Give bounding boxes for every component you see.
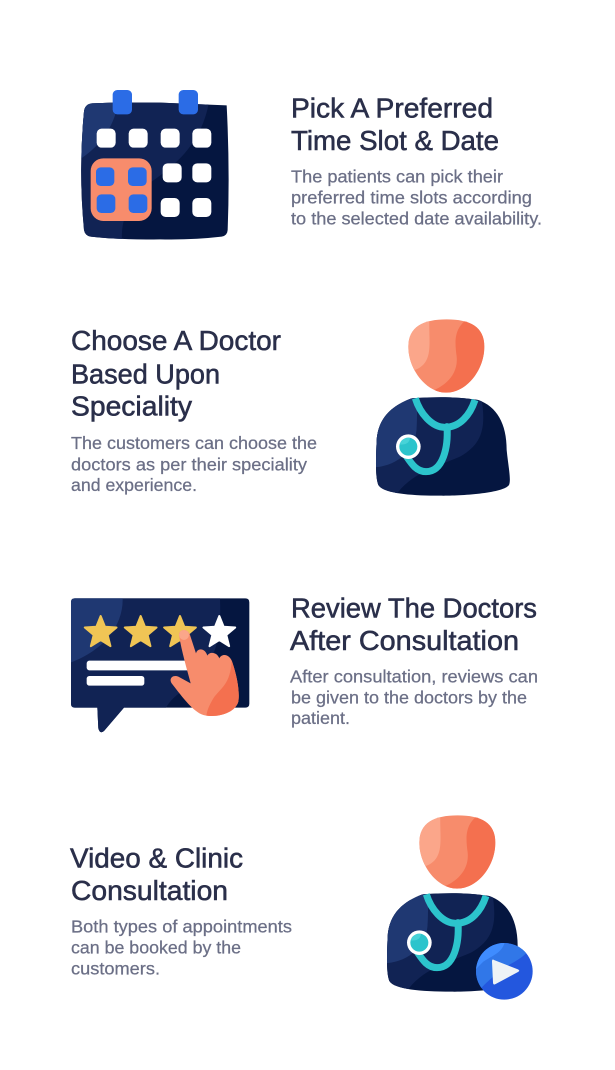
text block: time slot description: The patients can pick their [291,167,503,187]
icon: review speech bubble with stars and hand [71,598,249,732]
text block: consultation description [71,917,292,978]
heading: review the doctors: Review The Doctors [291,592,537,623]
panel: choose a doctor [71,317,510,497]
heading: choose a doctor: Speciality [71,390,192,422]
heading: choose a doctor: Based Upon [71,358,220,389]
doctor figure [381,813,521,993]
text block: consultation description: Both types of appointments [71,917,292,937]
pointing hand [170,630,239,716]
heading: choose a doctor: Choose A Doctor [71,325,281,356]
speech bubble [71,598,249,732]
text block: review description: After consultation, reviews can [290,667,538,687]
icon: doctor with stethoscope [370,317,510,497]
text block: consultation description: can be booked by the [71,938,241,958]
heading: choose a doctor [71,325,281,422]
icon: doctor with video play badge [381,813,533,1000]
text block: time slot description [291,167,542,228]
text block: doctor description: The customers can choose the [71,433,317,453]
heading: video and clinic consultation: Consultation [71,875,228,906]
icon: calendar [73,90,229,243]
text block: doctor description [71,433,317,495]
heading: pick a preferred time slot [291,92,499,156]
text block: doctor description: and experience. [71,475,197,495]
heading: video and clinic consultation: Video & Clinic [70,842,243,873]
heading: review the doctors [290,592,537,656]
icon: play button [476,943,533,1000]
heading: review the doctors: After Consultation [290,625,519,656]
text block: consultation description: customers. [71,958,160,978]
heading: video and clinic consultation [70,842,243,906]
panel: video and clinic consultation [70,813,533,1000]
heading: pick a preferred time slot: Pick A Preferred [291,92,493,123]
text block: review description: be given to the doctors by the [291,688,527,708]
text block: time slot description: to the selected date availability. [291,208,542,228]
rating stars [85,616,235,646]
text block: review description [290,667,538,728]
panel: review the doctors [71,592,538,732]
text block: time slot description: preferred time slots according [291,187,532,207]
panel: pick a time slot [73,90,542,243]
text block: doctor description: doctors as per their speciality [71,454,307,474]
heading: pick a preferred time slot: Time Slot & Date [291,125,499,156]
text block: review description: patient. [291,708,350,728]
